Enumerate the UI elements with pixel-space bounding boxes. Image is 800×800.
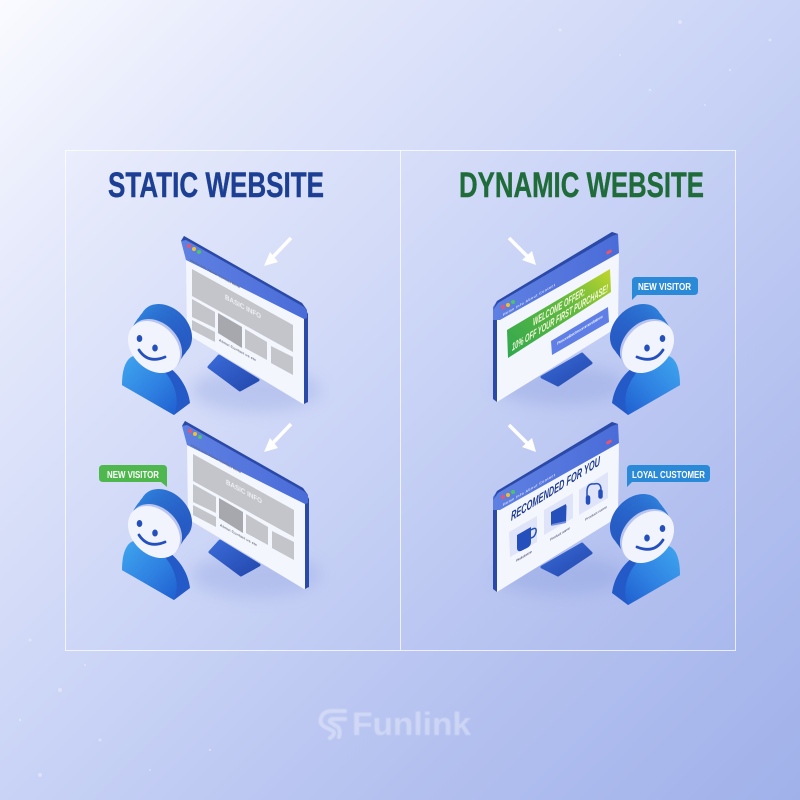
badge: new visitor blue [632, 277, 698, 300]
static monitor bottom: BASIC INFO [226, 477, 262, 506]
person: static top [118, 294, 202, 415]
dynamic monitor bottom: Product name [550, 526, 570, 542]
arrow: static bottom [264, 424, 291, 452]
icon: cup [517, 527, 536, 551]
person: static bottom [118, 479, 202, 600]
badge: loyal customer: LOYAL CUSTOMER [632, 469, 705, 481]
dynamic monitor bottom: Product name [516, 550, 532, 563]
person: dynamic top [600, 294, 684, 415]
static monitor bottom: Home Info About Contact More [191, 443, 241, 474]
icon: book [551, 504, 567, 526]
static monitor top [181, 236, 320, 412]
title: static website: STATIC WEBSITE [108, 166, 324, 205]
dynamic monitor bottom: Product name [585, 505, 607, 522]
title: dynamic website: DYNAMIC WEBSITE [459, 166, 704, 205]
icon: headphones [586, 484, 602, 504]
badge: new visitor green: NEW VISITOR [107, 469, 159, 481]
dynamic monitor top: 10% OFF YOUR FIRST PURCHASE! [512, 281, 608, 354]
dynamic monitor top: Home Info About Contact [503, 283, 556, 317]
dynamic monitor top: WELCOME OFFER: [533, 285, 585, 329]
dynamic monitor bottom: Home Info About Contact [503, 473, 556, 507]
badge: new visitor blue: NEW VISITOR [638, 281, 691, 293]
static monitor bottom: About Contact us etc [220, 523, 257, 547]
badge: loyal customer [627, 465, 710, 487]
static monitor top: About Contact us etc [219, 338, 256, 362]
person: dynamic bottom [600, 484, 684, 605]
badge: new visitor green [99, 465, 167, 487]
dynamic monitor top: Personalized recommendations [557, 313, 604, 346]
arrow: dynamic bottom [509, 425, 536, 452]
arrow: static top [264, 238, 291, 266]
dynamic monitor top [493, 232, 625, 405]
dynamic monitor bottom: RECOMENDED FOR YOU [511, 454, 600, 525]
dynamic monitor bottom [493, 422, 625, 595]
static monitor bottom [182, 421, 321, 597]
logo: Funlink: Funlink [352, 706, 471, 742]
static monitor top: Home Info About Contact More [190, 258, 240, 289]
arrow: dynamic top [509, 238, 536, 265]
panel frame [66, 150, 736, 650]
static monitor top: BASIC INFO [225, 292, 261, 321]
